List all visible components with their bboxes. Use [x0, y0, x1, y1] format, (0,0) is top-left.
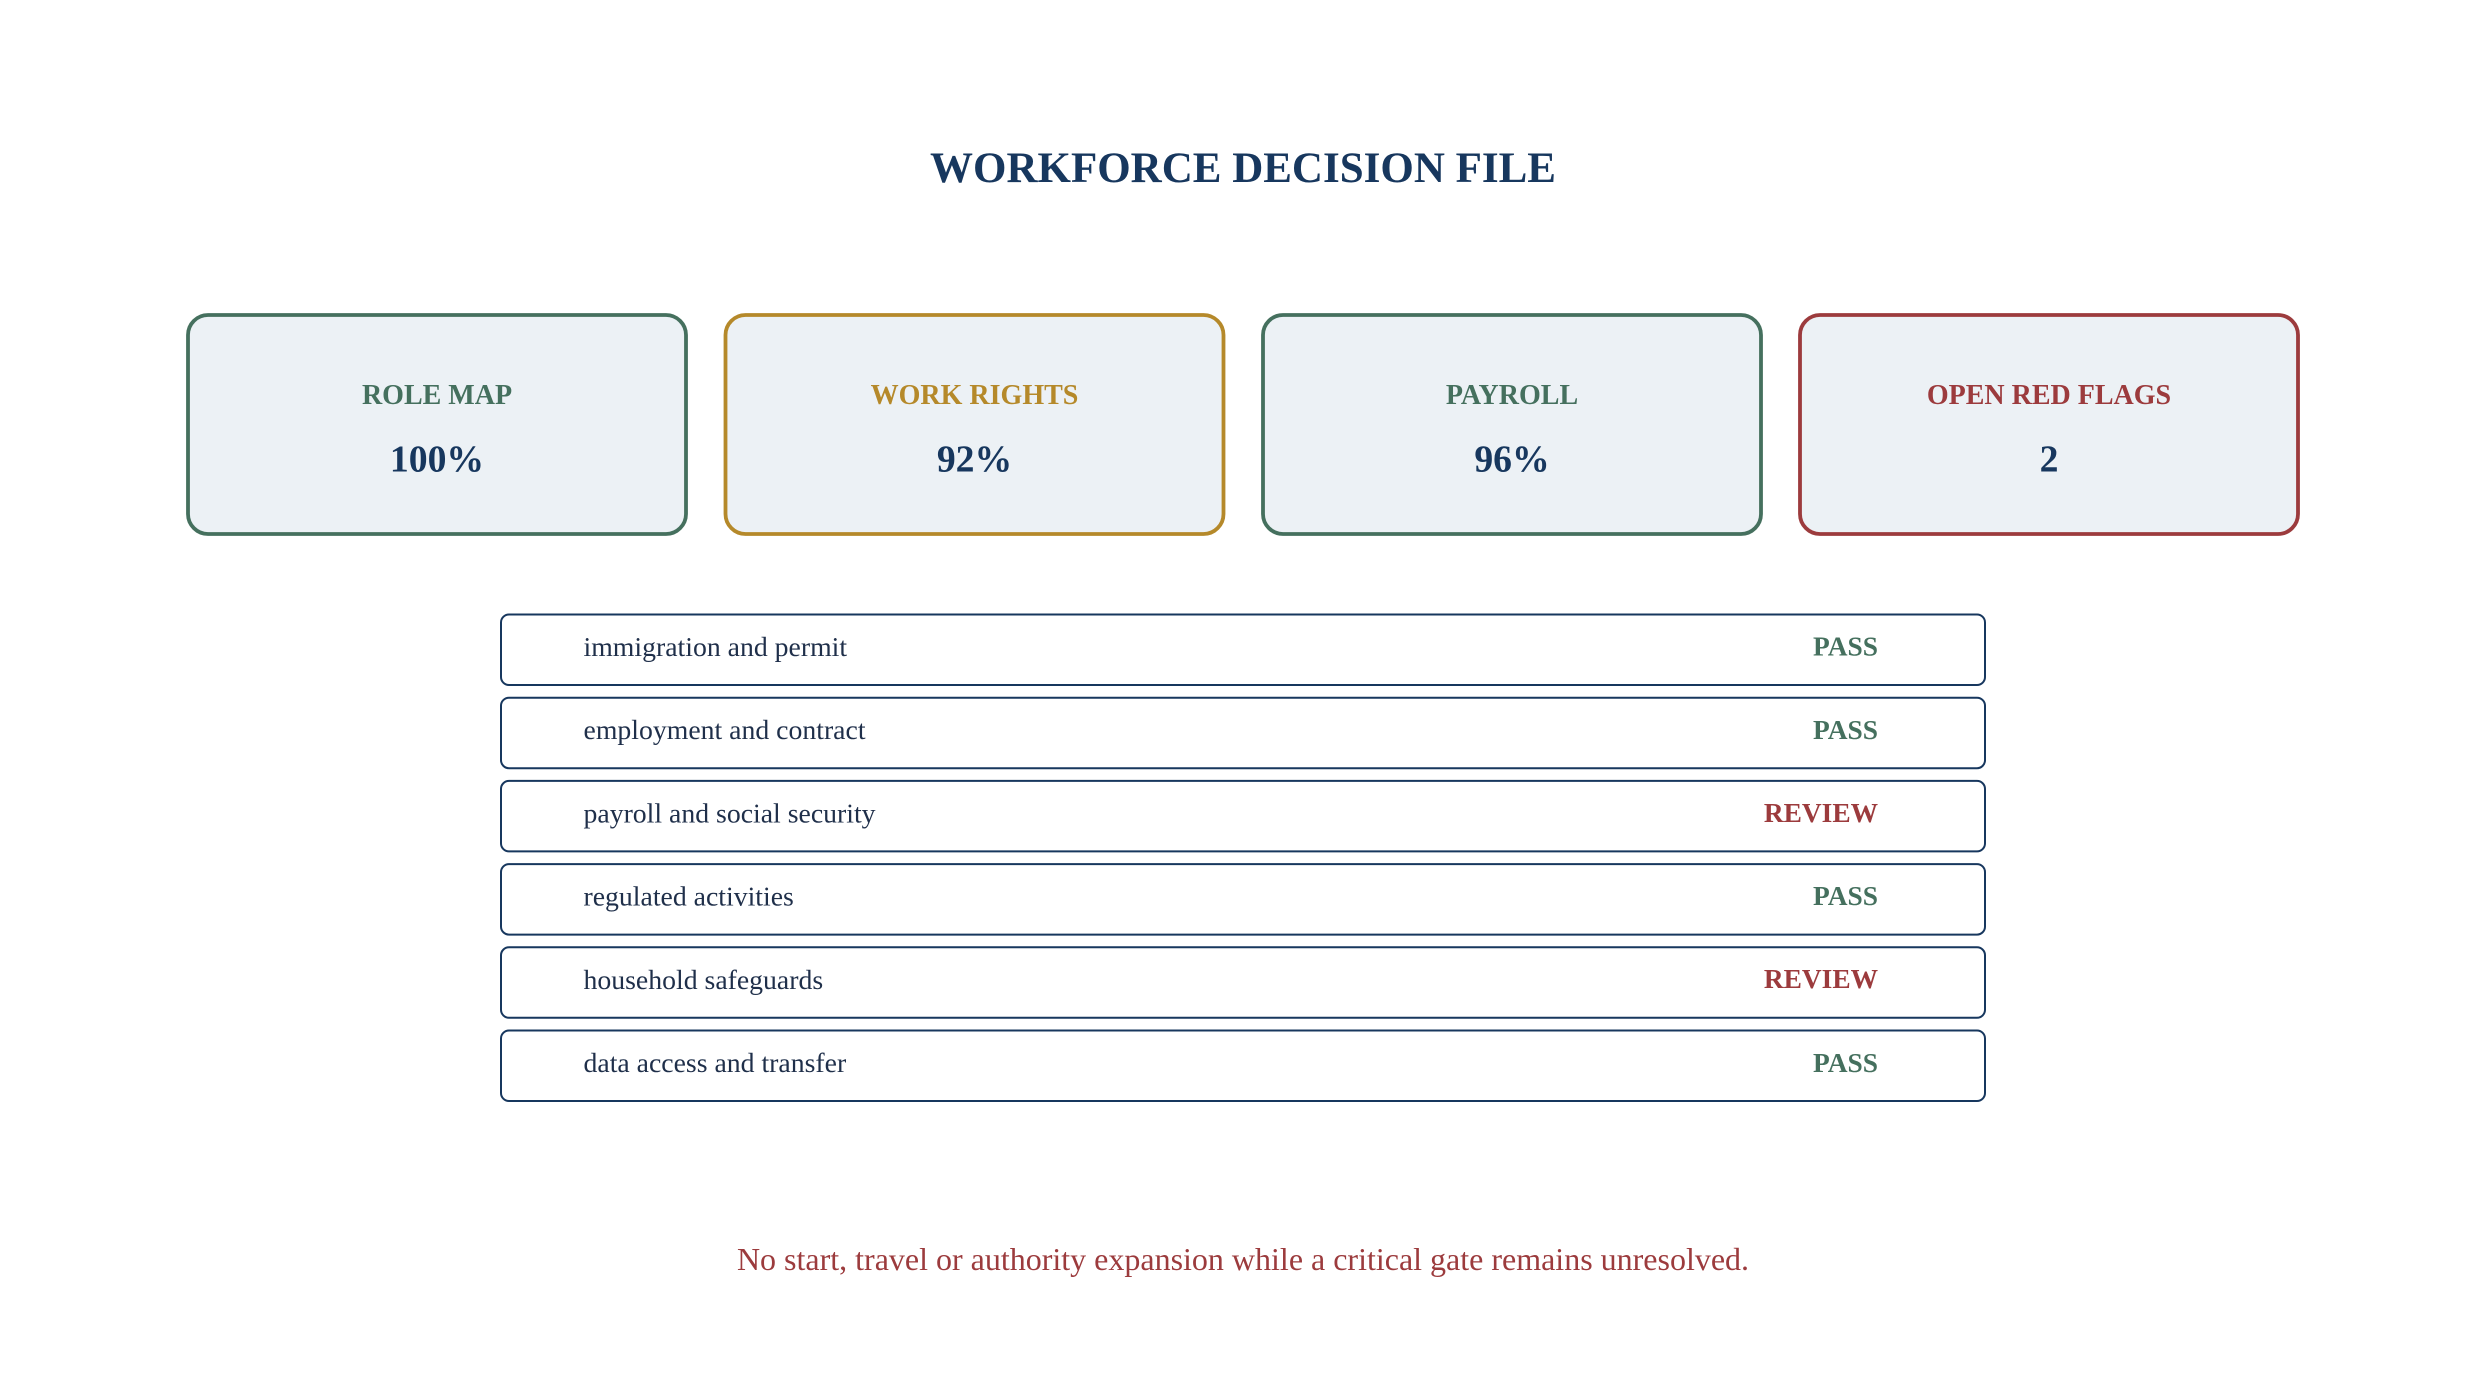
panel: work rights: 92%: [937, 438, 1012, 480]
panel: role map: 100%: [390, 438, 484, 480]
row: payroll and social security: payroll and social security: [584, 798, 876, 829]
panel: work rights: [726, 315, 1224, 534]
row: household safeguards: household safeguards: [584, 965, 823, 996]
row: household safeguards: REVIEW: [1764, 964, 1878, 994]
row: regulated activities: [501, 864, 1985, 935]
row: household safeguards: [501, 947, 1985, 1018]
title: WORKFORCE DECISION FILE: [930, 145, 1556, 192]
footer note: No start, travel or authority expansion while a critical gate remains unresolved.: [737, 1241, 1749, 1277]
row: data access and transfer: PASS: [1813, 1048, 1878, 1078]
row: immigration and permit: [501, 614, 1985, 685]
row: data access and transfer: data access and transfer: [584, 1048, 846, 1079]
row: payroll and social security: [501, 781, 1985, 851]
row: immigration and permit: PASS: [1813, 632, 1878, 662]
panel: payroll: PAYROLL: [1446, 380, 1578, 411]
panel: open red flags: [1800, 315, 2298, 534]
row: regulated activities: PASS: [1813, 881, 1878, 911]
panel: open red flags: 2: [2040, 438, 2058, 480]
panel: role map: [188, 315, 686, 534]
row: payroll and social security: REVIEW: [1764, 798, 1878, 828]
panel: role map: ROLE MAP: [362, 380, 512, 411]
panel: payroll: 96%: [1474, 438, 1550, 480]
row: employment and contract: PASS: [1813, 715, 1878, 745]
row: employment and contract: [501, 698, 1985, 768]
panel: open red flags: OPEN RED FLAGS: [1927, 380, 2171, 411]
panel: payroll: [1263, 315, 1761, 534]
panel: work rights: WORK RIGHTS: [871, 380, 1078, 411]
row: employment and contract: employment and contract: [584, 715, 866, 746]
row: immigration and permit: immigration and permit: [584, 632, 847, 663]
row: data access and transfer: [501, 1030, 1985, 1101]
row: regulated activities: regulated activities: [584, 882, 794, 913]
